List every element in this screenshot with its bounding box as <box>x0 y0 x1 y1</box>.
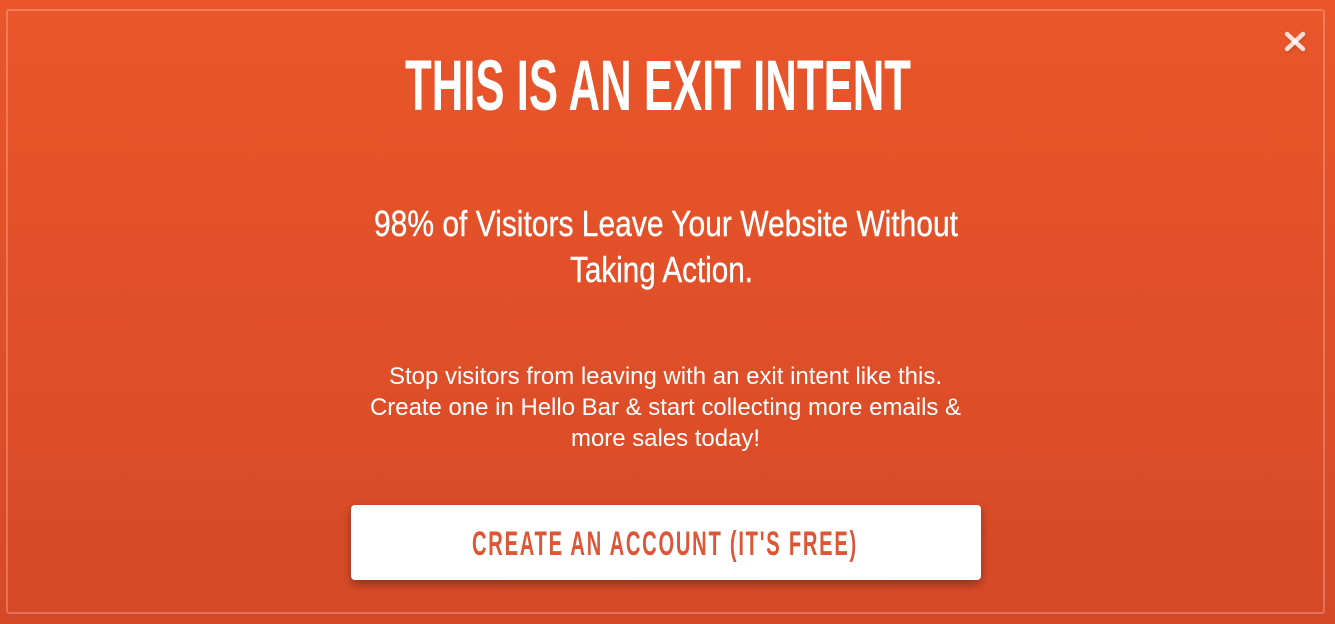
subheading: 98% of Visitors Leave Your Website Without <box>374 203 958 244</box>
body text: Create one in Hello Bar & start collecting more emails & <box>370 394 961 421</box>
subheading: Taking Action. <box>570 249 753 290</box>
subheading <box>374 203 958 290</box>
body text: Stop visitors from leaving with an exit intent like this. <box>389 363 942 390</box>
body text: more sales today! <box>571 425 760 452</box>
button label: CREATE AN ACCOUNT (IT'S FREE) <box>472 525 858 563</box>
title: THIS IS AN EXIT INTENT <box>405 47 911 126</box>
body text <box>370 363 961 452</box>
call to action button <box>351 505 981 580</box>
icon: close button <box>1287 34 1303 49</box>
